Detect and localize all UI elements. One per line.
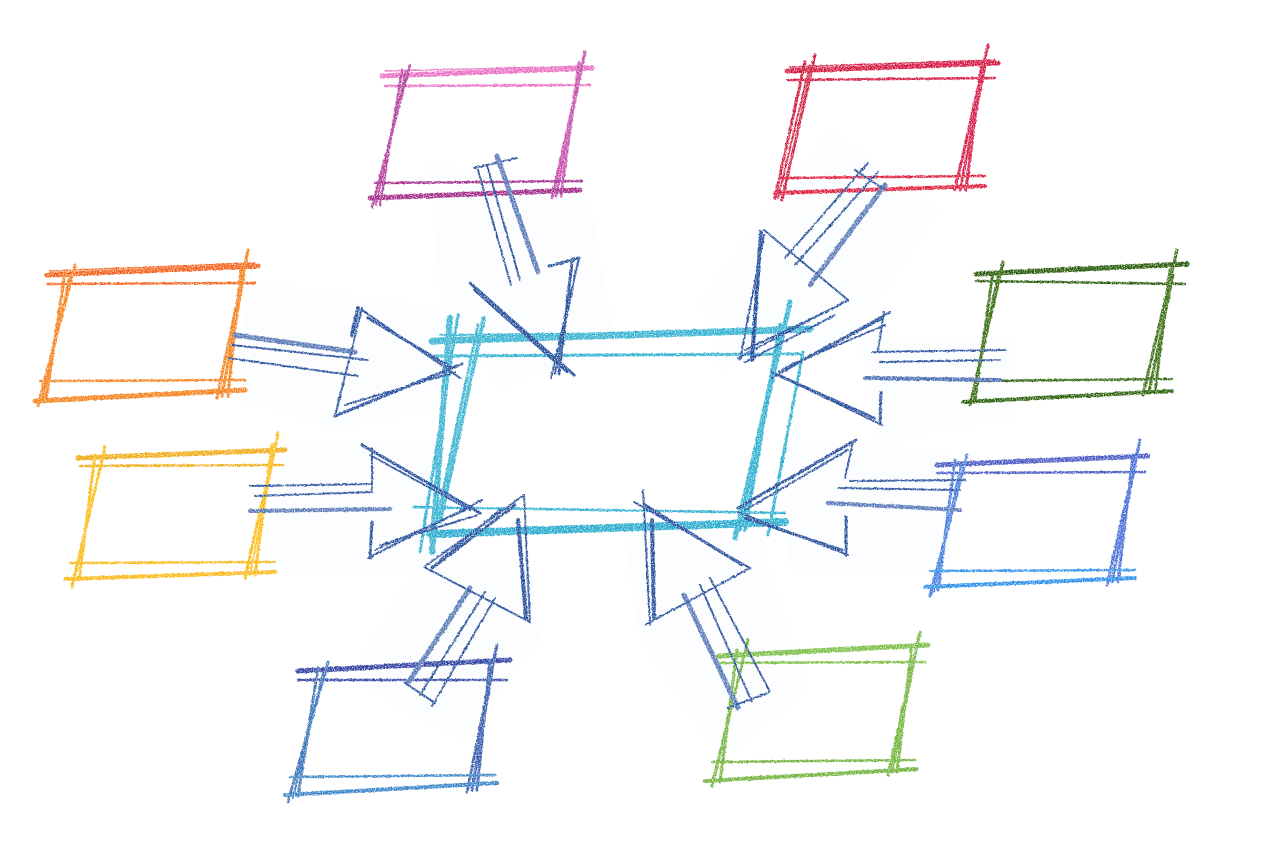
arrow: yellow box to center (250, 445, 482, 558)
arrow: light green box to center (634, 490, 770, 708)
arrow: pink box to center (470, 156, 579, 378)
yellow box (65, 433, 285, 587)
pink box (370, 52, 592, 207)
arrow: navy box to center (405, 495, 530, 706)
periwinkle blue box (925, 440, 1148, 596)
arrow: red box to center (738, 163, 885, 362)
arrow: dark green box to center (772, 312, 1005, 425)
arrow: orange box to center (228, 308, 462, 416)
red box (775, 45, 998, 200)
navy blue box (285, 645, 510, 802)
orange box (35, 250, 258, 406)
center box (413, 302, 810, 552)
dark green box (963, 250, 1187, 405)
light green box (705, 632, 928, 786)
arrow: periwinkle box to center (738, 440, 965, 555)
